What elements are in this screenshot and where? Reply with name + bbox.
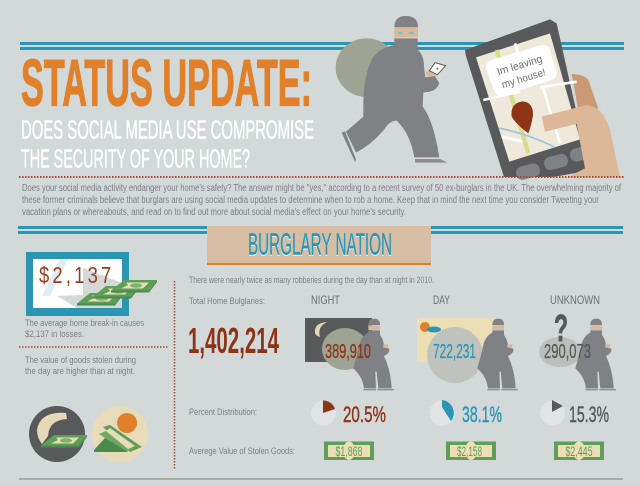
row labels: Percent Distribution:	[189, 407, 257, 418]
day/night caption: The value of goods stolen during	[25, 355, 136, 366]
unknown illustration: ?	[554, 308, 568, 350]
value bill: night	[324, 442, 374, 460]
speech bubble: my house!	[500, 66, 547, 91]
section stripes	[18, 226, 623, 234]
percent values: 38.1%	[462, 402, 502, 427]
loss caption	[25, 318, 144, 340]
percent values: 20.5%	[343, 402, 386, 427]
day/night caption	[25, 355, 136, 377]
column headings: DAY	[433, 293, 450, 307]
percent values: 15.3%	[569, 402, 609, 427]
day/night caption: the day are higher than at night.	[25, 366, 135, 377]
total number: 1,402,214	[188, 320, 279, 361]
section banner: BURGLARY NATION	[248, 226, 392, 262]
pie: unknown	[540, 400, 565, 426]
illustration: burglar with sack and phone	[336, 16, 447, 163]
percent values	[343, 402, 609, 427]
loss callout: window with money: $2,137	[39, 263, 114, 289]
subtitle: DOES SOCIAL MEDIA USE COMPROMISE	[21, 114, 314, 144]
intro paragraph: vacation plans or whereabouts, and read on to find out more about social media's effect on your home's security.	[22, 207, 406, 218]
footer rule	[19, 478, 623, 480]
section banner: BURGLARY NATION	[248, 228, 392, 262]
pie: night	[311, 400, 336, 426]
column headings: NIGHT	[311, 293, 341, 307]
icon: night money	[29, 406, 87, 462]
subtitle	[21, 114, 314, 174]
map pin	[511, 101, 533, 133]
header stripes	[20, 42, 624, 50]
night illustration: 389,910	[325, 341, 371, 363]
icon: day money	[92, 406, 148, 462]
row labels	[189, 296, 295, 457]
dotted divider	[19, 176, 625, 178]
unknown illustration	[539, 308, 616, 390]
value bill: day	[446, 442, 496, 460]
value bill: day: $2,158	[457, 444, 482, 459]
value bill: unknown: $2,445	[566, 444, 592, 459]
loss callout: window with money	[26, 252, 157, 316]
row labels: Averege Value of Stolen Goods:	[189, 446, 295, 457]
loss caption: $2,137 in losses.	[25, 329, 84, 340]
speech bubble: Im leaving	[496, 53, 544, 78]
unknown illustration: 290,073	[544, 341, 591, 363]
illustration: hand holding phone with map	[465, 19, 620, 181]
intro paragraph	[22, 183, 621, 218]
speech bubble	[486, 45, 557, 96]
day illustration	[417, 318, 518, 390]
title: STATUS UPDATE:	[21, 46, 312, 120]
subtitle: THE SECURITY OF YOUR HOME?	[21, 144, 250, 174]
section banner	[207, 226, 431, 265]
column headings: UNKNOWN	[550, 293, 600, 307]
value bill: unknown	[554, 442, 604, 460]
value bill: night: $1,868	[336, 444, 362, 459]
column headings	[311, 293, 600, 307]
pie: day	[430, 400, 454, 426]
chart intro: There were nearly twice as many robberies during the day than at night in 2010.	[189, 275, 434, 286]
day illustration: 722,231	[433, 341, 476, 363]
loss caption: The average home break-in causes	[25, 318, 144, 329]
row labels: Total Home Bulglaries:	[189, 296, 265, 307]
night illustration	[305, 318, 394, 390]
